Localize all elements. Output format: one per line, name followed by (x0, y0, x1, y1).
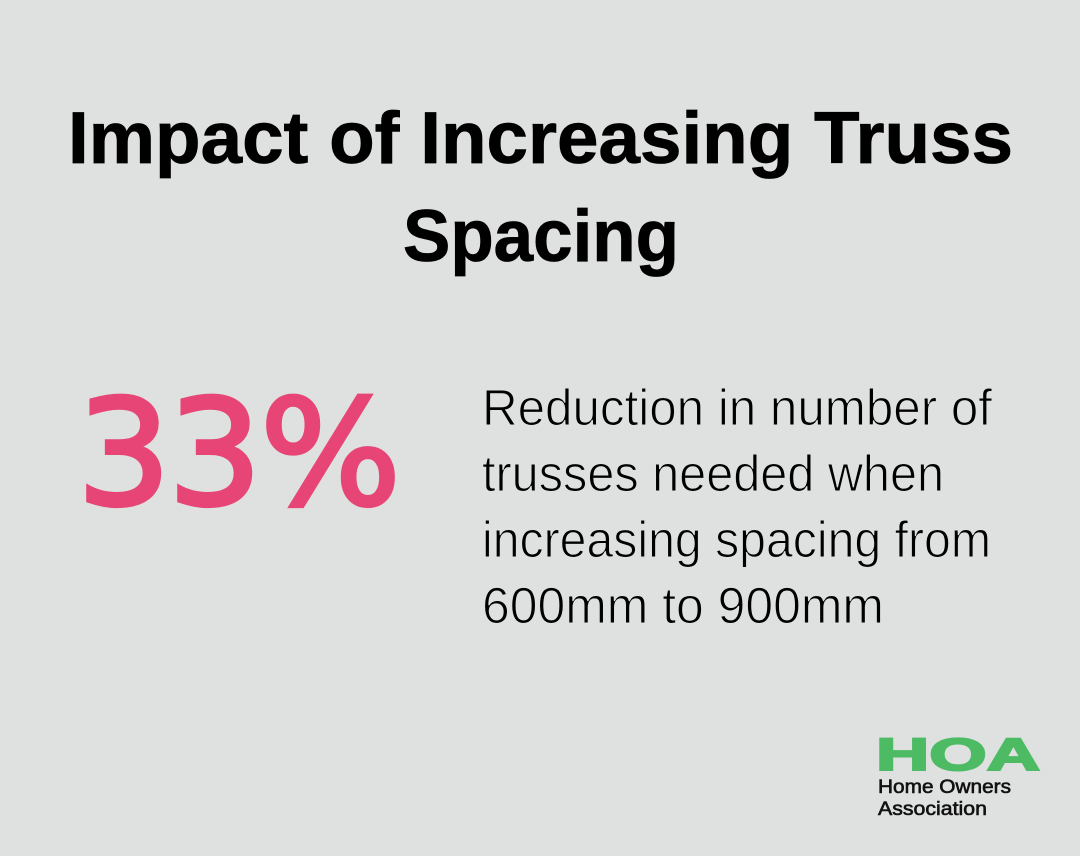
big statistic: 33%: 3 (168, 369, 262, 539)
statistic description (482, 379, 993, 634)
logo mark: HOA: HOA (876, 729, 1040, 780)
logo wordmark: Home Owners (878, 777, 1011, 798)
statistic description: Reduction in number of (482, 379, 993, 436)
title: Spacing (403, 196, 679, 277)
statistic description: 600mm to 900mm (482, 577, 884, 634)
title: Impact of Increasing Truss (68, 98, 1013, 179)
statistic description: increasing spacing from (482, 511, 991, 568)
big statistic: 33%: % (260, 369, 401, 539)
title (68, 98, 1013, 277)
logo wordmark: Association (878, 799, 987, 820)
logo wordmark (878, 777, 1011, 820)
statistic description: trusses needed when (482, 445, 944, 502)
logo: Home Owners Association (876, 729, 1040, 820)
big statistic: 33% (77, 369, 401, 539)
big statistic: 33%: 3 (77, 369, 171, 539)
